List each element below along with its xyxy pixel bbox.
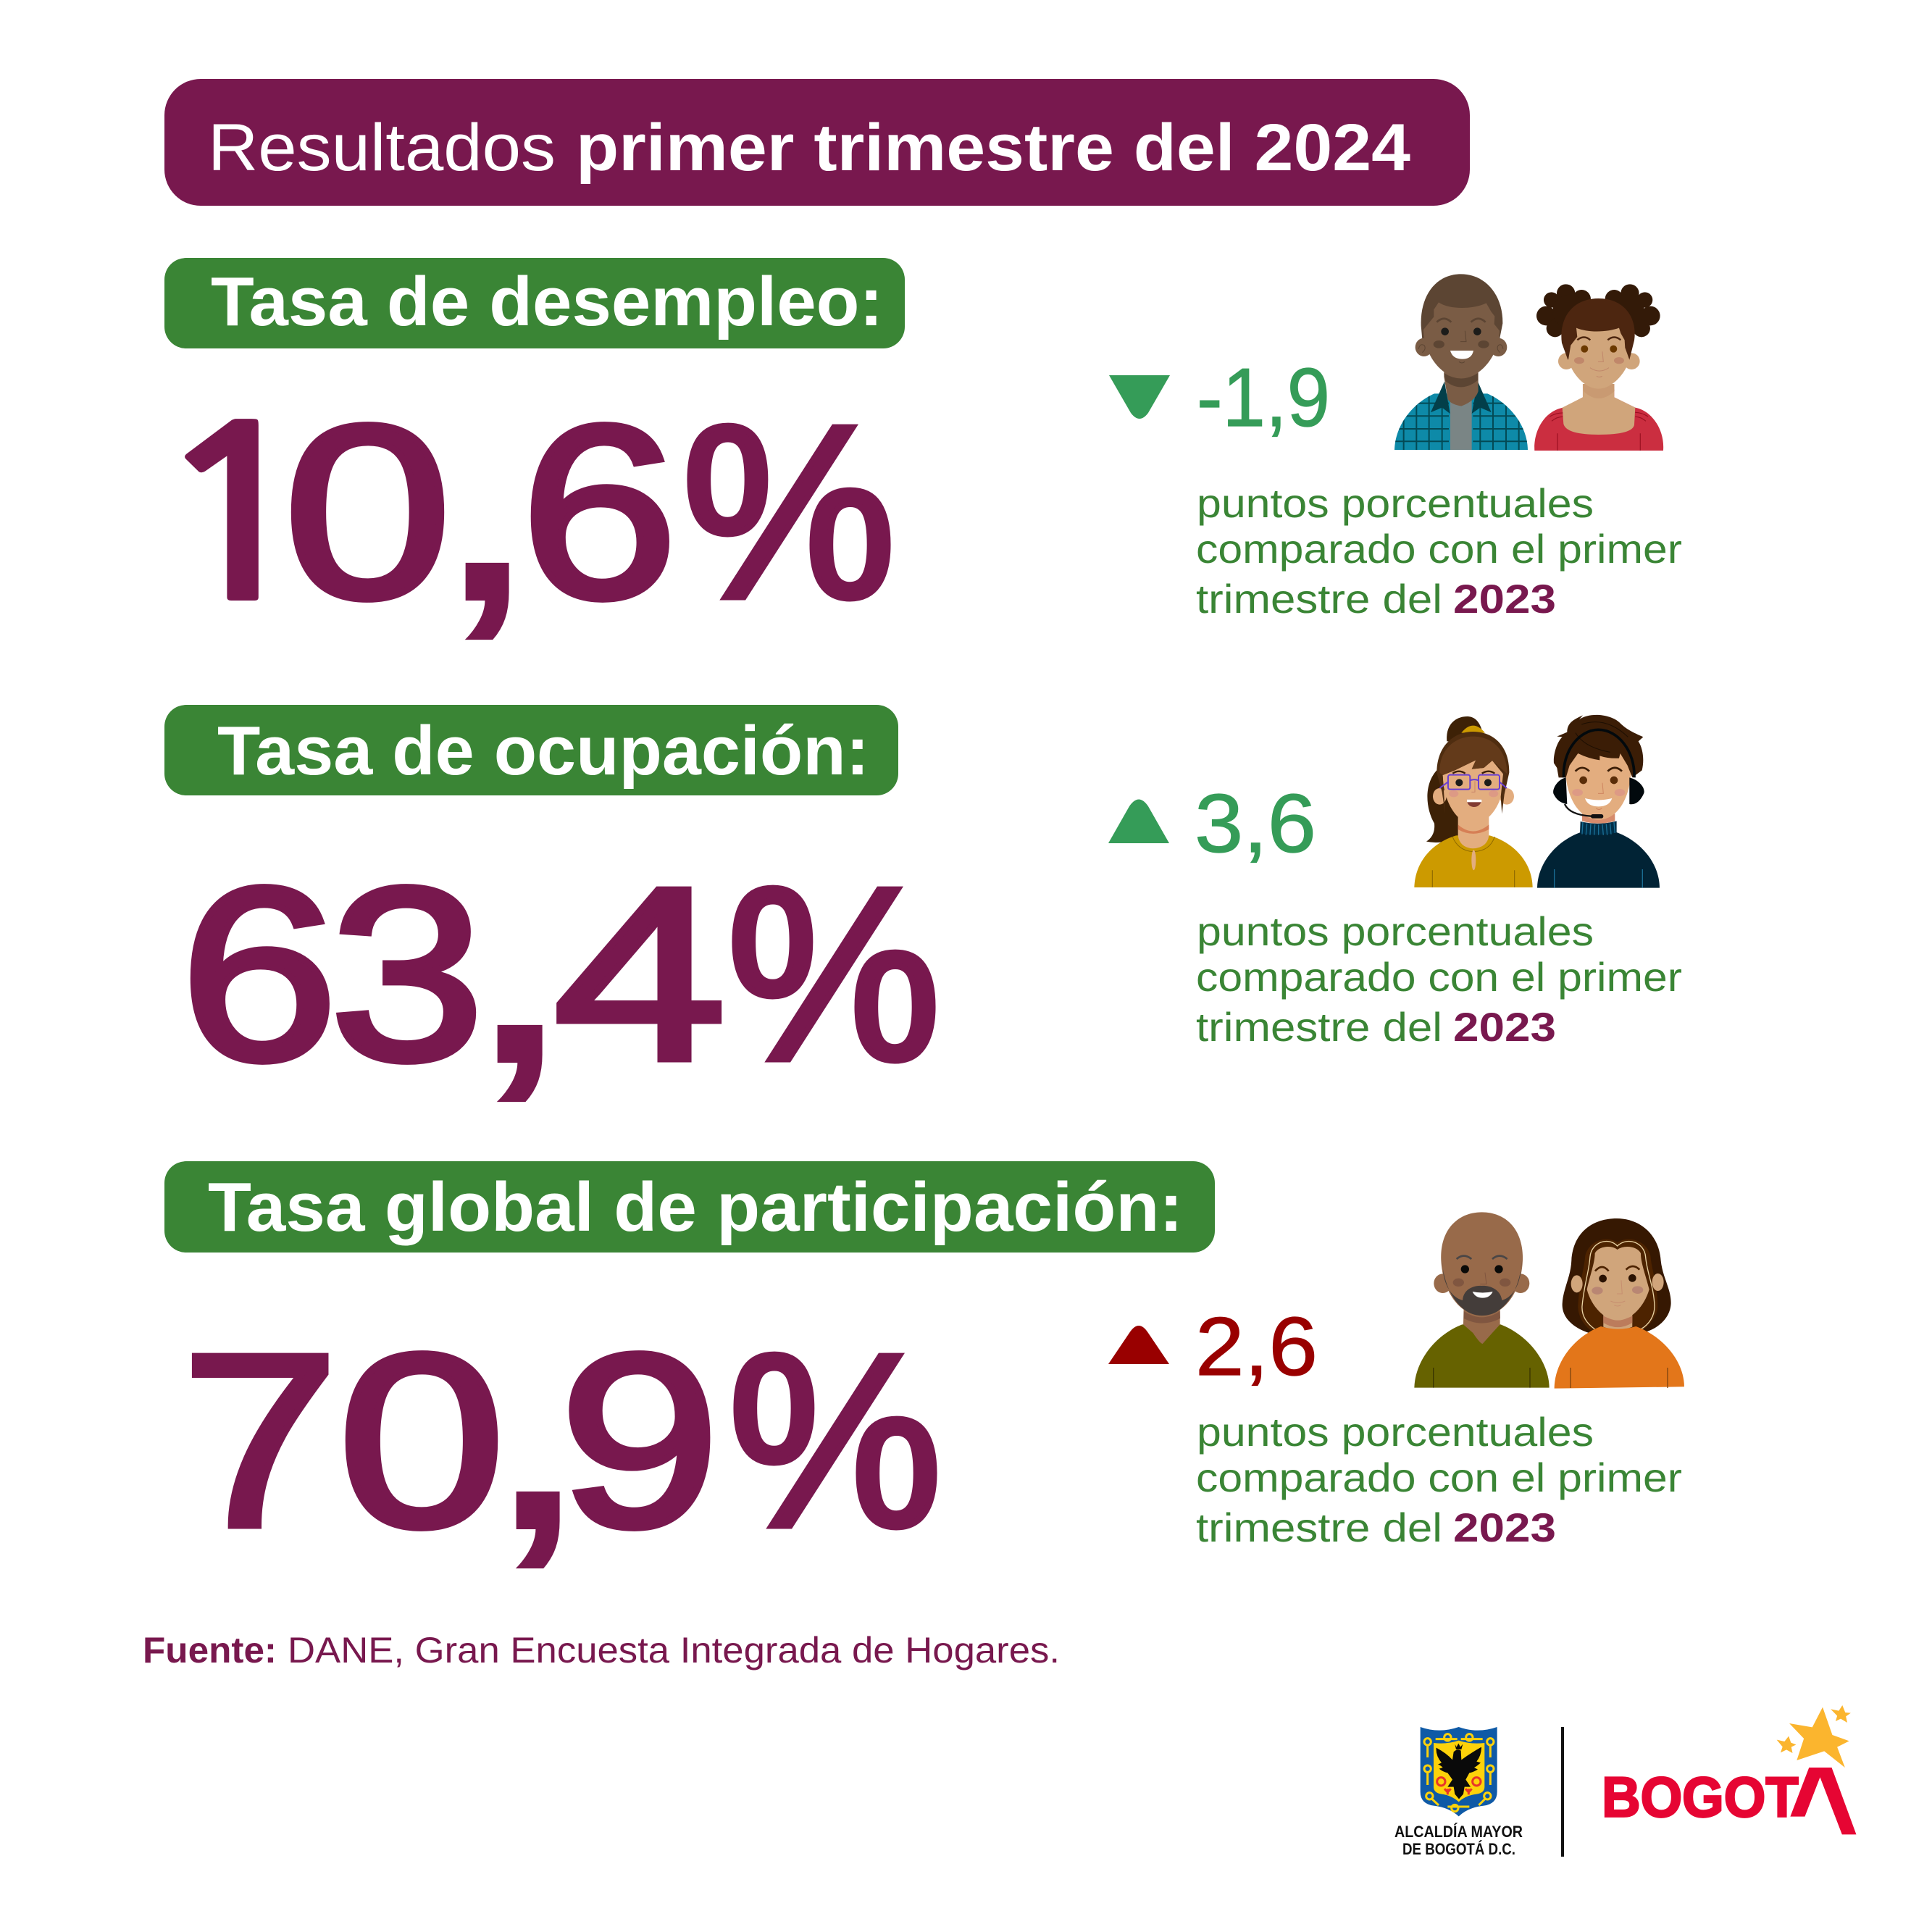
description: participacion: trimestre del xyxy=(1196,1505,1442,1550)
bearded man xyxy=(1414,1212,1550,1388)
description: desempleo: 2023 xyxy=(1453,576,1556,622)
divider between logos xyxy=(1561,1727,1564,1857)
woman with glasses xyxy=(1414,716,1533,887)
arrow up: ocupacion xyxy=(1108,800,1169,843)
description: ocupacion: 2023 xyxy=(1453,1004,1556,1050)
big number: desempleo: 0 xyxy=(283,375,452,650)
logo: bogota: BOGOT xyxy=(1602,1765,1799,1829)
big number: desempleo: , xyxy=(444,372,530,655)
logo: alcaldia crest xyxy=(1421,1727,1497,1816)
woman with long hair xyxy=(1555,1218,1684,1389)
icon: bearded man and woman (participacion) xyxy=(1414,1212,1684,1389)
icon: man and woman (desempleo) xyxy=(1391,274,1663,451)
big number: ocupacion: 6 xyxy=(180,837,338,1112)
crest caption: ALCALDÍA MAYOR xyxy=(1394,1823,1523,1841)
source note: DANE, Gran Encuesta Integrada de Hogares. xyxy=(288,1630,1060,1670)
heading: tasa de desempleo: Tasa de desempleo: xyxy=(211,263,883,340)
icon: woman and man with headset (ocupacion) xyxy=(1414,715,1660,888)
arrow up: participacion xyxy=(1108,1326,1169,1364)
heading: tasa de ocupacion: Tasa de ocupación: xyxy=(217,712,869,790)
description: desempleo: trimestre del xyxy=(1196,576,1442,622)
big number: participacion: % xyxy=(728,1303,942,1578)
big number: participacion: , xyxy=(495,1300,580,1584)
big number: desempleo: 1 xyxy=(147,399,325,636)
big number: ocupacion: , xyxy=(475,834,564,1117)
description: participacion xyxy=(1196,1409,1682,1550)
description: ocupacion: trimestre del xyxy=(1196,1004,1442,1050)
big number: ocupacion: 3 xyxy=(330,837,485,1112)
heading: tasa global de participacion: Tasa global de participación: xyxy=(208,1168,1183,1246)
big number: participacion xyxy=(181,1300,942,1584)
crest caption: DE BOGOTÁ D.C. xyxy=(1402,1840,1515,1858)
change value: ocupacion: 3,6 xyxy=(1195,778,1316,870)
man with plaid shirt xyxy=(1391,274,1531,450)
title banner: primer trimestre del 2024 xyxy=(576,111,1410,185)
change value: desempleo: -1,9 xyxy=(1197,352,1330,444)
description: desempleo xyxy=(1196,480,1682,622)
arrow down: desempleo xyxy=(1109,375,1170,419)
woman with hair buns xyxy=(1534,284,1663,451)
title banner xyxy=(164,79,1470,206)
crest caption xyxy=(1394,1823,1523,1858)
description: desempleo: comparado con el primer xyxy=(1196,526,1682,572)
man with headset xyxy=(1537,715,1660,888)
logo: bogota xyxy=(1602,1705,1856,1834)
source note: Fuente: xyxy=(143,1630,277,1670)
description: ocupacion xyxy=(1196,908,1682,1050)
big number: participacion: 9 xyxy=(559,1303,720,1578)
title banner: Resultados xyxy=(208,111,556,185)
big number: desempleo: % xyxy=(682,375,896,650)
description: ocupacion: puntos porcentuales xyxy=(1197,908,1594,954)
description: ocupacion: comparado con el primer xyxy=(1196,954,1682,1000)
big number: desempleo: 6 xyxy=(520,375,678,650)
big number: participacion: 7 xyxy=(181,1303,339,1578)
change value: participacion: 2,6 xyxy=(1195,1301,1318,1393)
big number: ocupacion xyxy=(180,834,941,1117)
big number: ocupacion: 4 xyxy=(553,837,727,1112)
description: participacion: puntos porcentuales xyxy=(1197,1409,1594,1455)
description: desempleo: puntos porcentuales xyxy=(1197,480,1594,526)
description: participacion: comparado con el primer xyxy=(1196,1455,1682,1500)
big number: ocupacion: % xyxy=(727,837,941,1112)
description: participacion: 2023 xyxy=(1453,1505,1556,1550)
big number: desempleo xyxy=(147,372,896,655)
big number: participacion: 0 xyxy=(338,1303,506,1578)
